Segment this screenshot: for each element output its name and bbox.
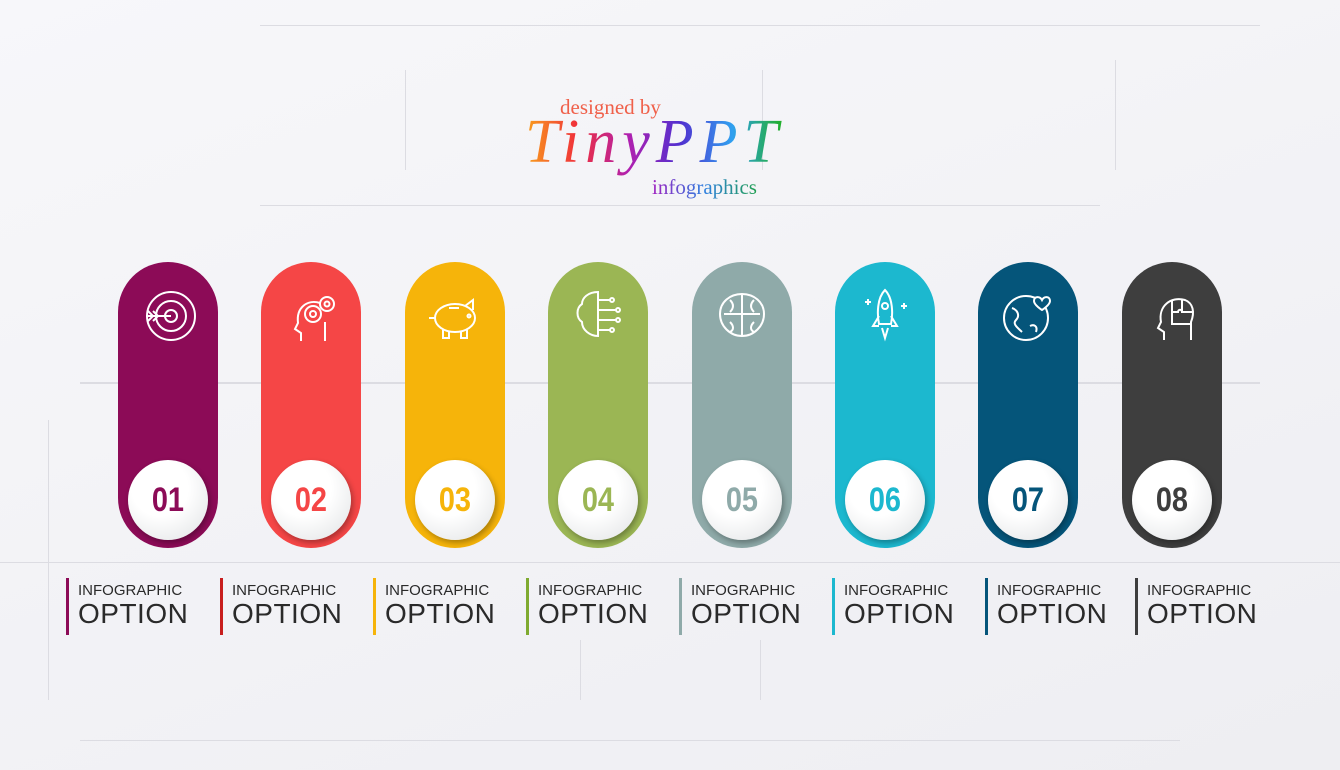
- number 08: 08: [1156, 481, 1188, 519]
- icon: globe heart: [1003, 295, 1051, 341]
- pill 1: [118, 262, 218, 548]
- logo: infographics: [652, 175, 757, 199]
- label 6: [832, 578, 954, 635]
- pill 7: [978, 262, 1078, 548]
- number 05: 05: [726, 481, 758, 519]
- number 06: 06: [869, 481, 901, 519]
- pill 8: [1122, 262, 1222, 548]
- logo: designed by: [560, 95, 661, 119]
- label 1: INFOGRAPHIC: [78, 582, 182, 599]
- icon: piggy bank: [429, 298, 476, 339]
- number 08: [1132, 460, 1212, 540]
- icon: rocket: [865, 288, 907, 342]
- label 7: INFOGRAPHIC: [997, 582, 1101, 599]
- number 01: 01: [152, 481, 184, 519]
- pill 5: [692, 262, 792, 548]
- icon: target: [146, 291, 196, 341]
- label 7: [985, 578, 1107, 635]
- label 1: [66, 578, 188, 635]
- number 02: 02: [295, 481, 327, 519]
- label 4: INFOGRAPHIC: [538, 582, 642, 599]
- label 4: OPTION: [538, 598, 648, 629]
- label 7: OPTION: [997, 598, 1107, 629]
- label 2: OPTION: [232, 598, 342, 629]
- number 06: [845, 460, 925, 540]
- pill 6: [835, 262, 935, 548]
- label 5: INFOGRAPHIC: [691, 582, 795, 599]
- number 03: 03: [439, 481, 471, 519]
- number 07: [988, 460, 1068, 540]
- logo: [525, 95, 784, 199]
- label 8: OPTION: [1147, 598, 1257, 629]
- label 3: [373, 578, 495, 635]
- number 01: [128, 460, 208, 540]
- pill 2: [261, 262, 361, 548]
- icon: head gears: [294, 296, 335, 341]
- label 4: [526, 578, 648, 635]
- number 05: [702, 460, 782, 540]
- label 6: OPTION: [844, 598, 954, 629]
- pill 4: [548, 262, 648, 548]
- label 5: [679, 578, 801, 635]
- logo: TinyPPT: [525, 108, 784, 176]
- number 04: 04: [582, 481, 614, 519]
- number 04: [558, 460, 638, 540]
- label 5: OPTION: [691, 598, 801, 629]
- label 8: INFOGRAPHIC: [1147, 582, 1251, 599]
- icon: digital brain: [576, 291, 621, 337]
- icon: brain puzzle: [719, 293, 765, 337]
- icon: head puzzle: [1156, 298, 1194, 340]
- label 3: INFOGRAPHIC: [385, 582, 489, 599]
- label 3: OPTION: [385, 598, 495, 629]
- pill 3: [405, 262, 505, 548]
- number 07: 07: [1012, 481, 1044, 519]
- label 6: INFOGRAPHIC: [844, 582, 948, 599]
- label 8: [1135, 578, 1257, 635]
- number 02: [271, 460, 351, 540]
- label 1: OPTION: [78, 598, 188, 629]
- label 2: INFOGRAPHIC: [232, 582, 336, 599]
- label 2: [220, 578, 342, 635]
- number 03: [415, 460, 495, 540]
